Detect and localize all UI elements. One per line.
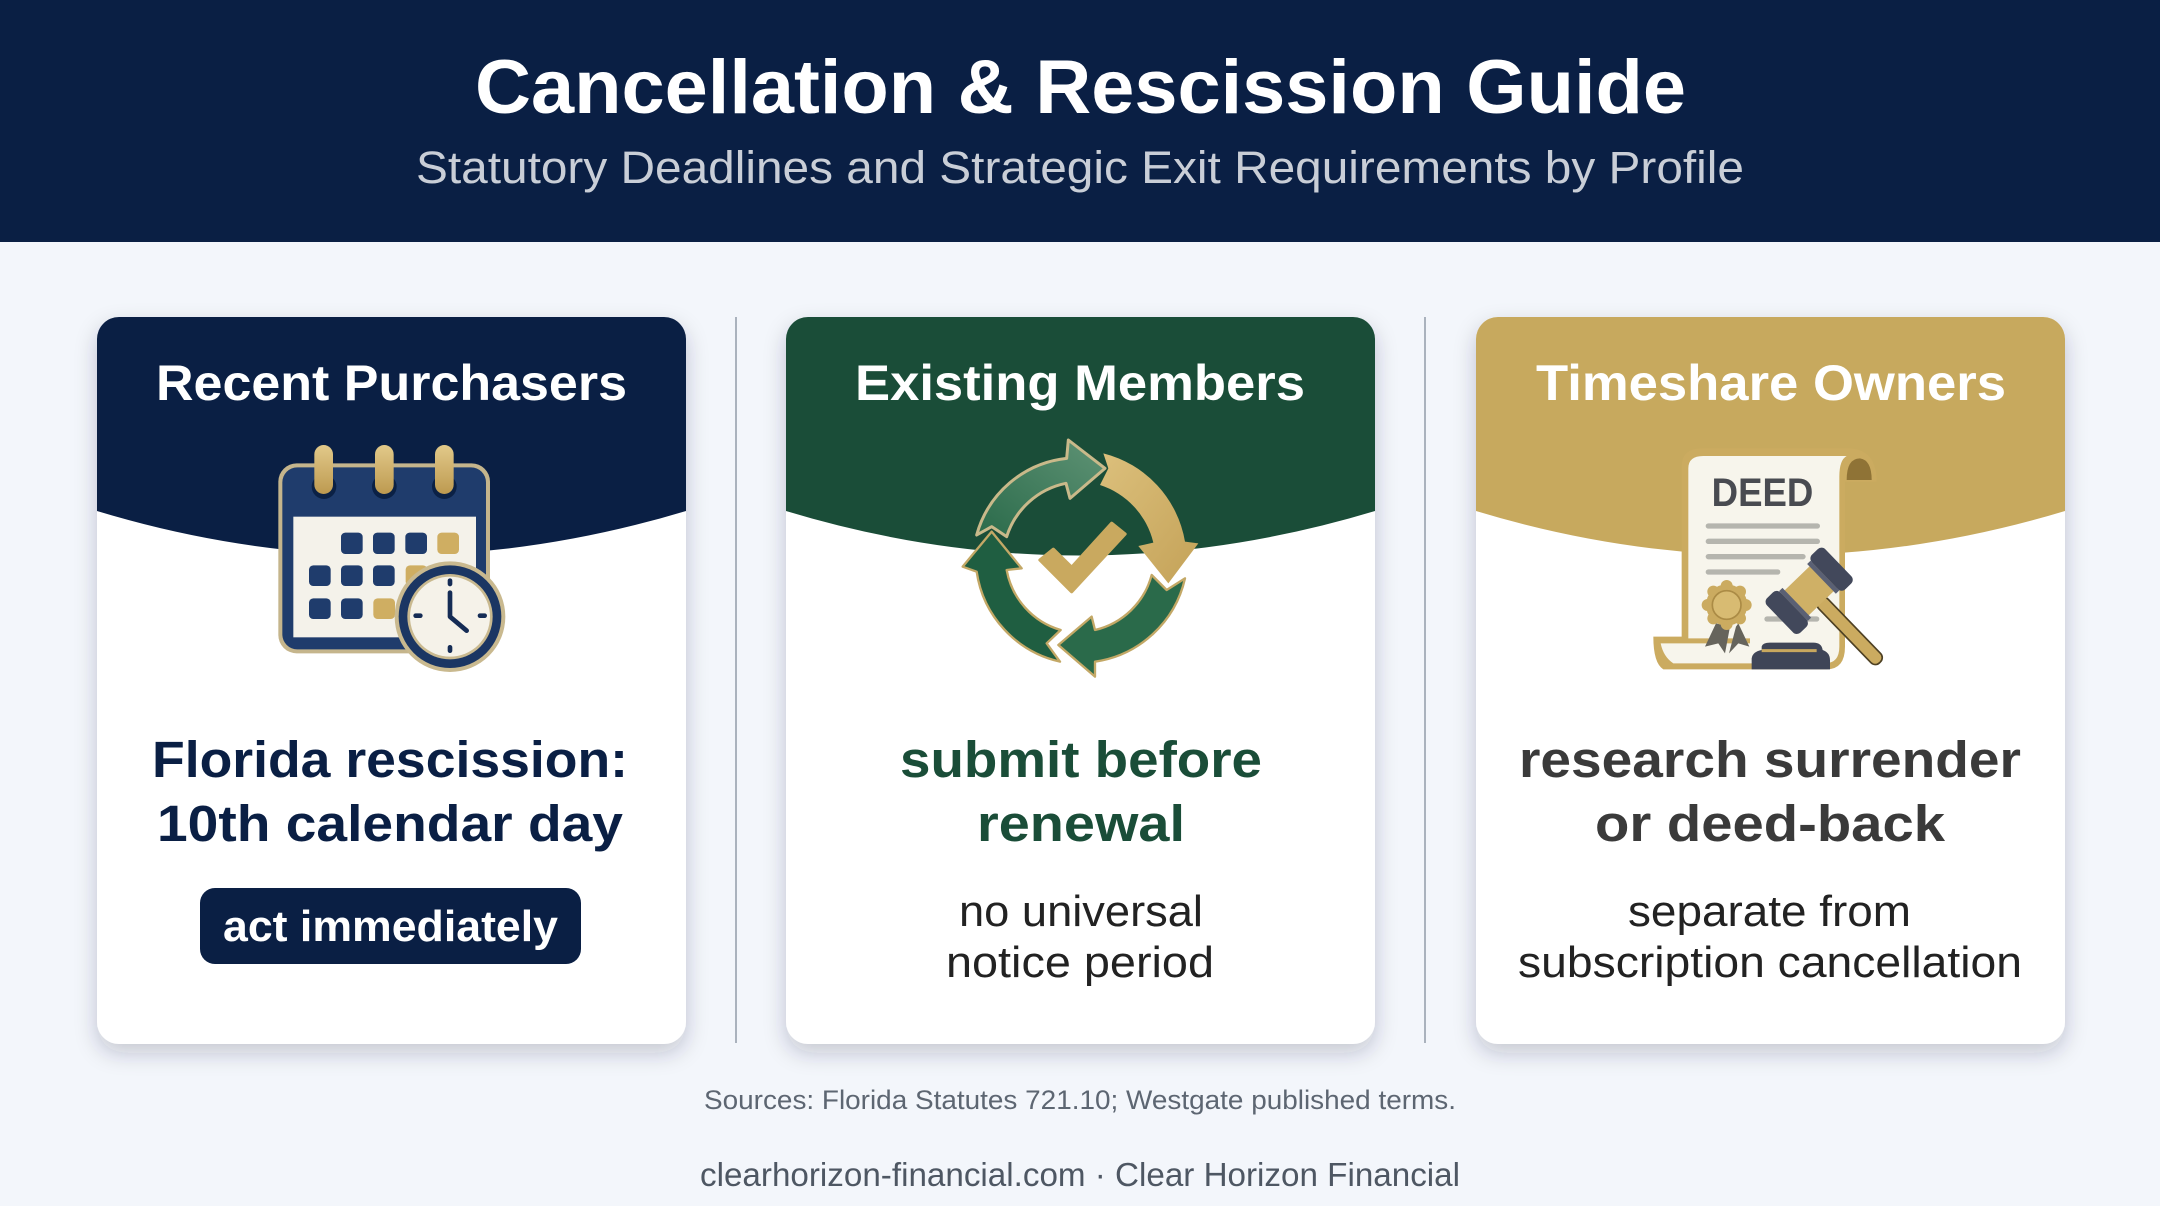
sources: Sources: Florida Statutes 721.10; Westgate published terms.: [704, 1085, 1456, 1115]
footer: clearhorizon-financial.com · Clear Horizon Financial: [700, 1156, 1460, 1193]
title: Cancellation & Rescission Guide: [475, 45, 1686, 130]
main text: research surrender or deed-back: research surrender: [1519, 731, 2021, 788]
pill: act immediately: act immediately: [223, 902, 559, 951]
panel: existing members: [786, 317, 1375, 1044]
panel: recent purchasers: [97, 317, 686, 1044]
main text: florida rescission: Florida rescission:: [152, 731, 628, 788]
main text: florida rescission: 10th calendar day: [157, 795, 624, 852]
main text: florida rescission: [152, 731, 628, 852]
main text: submit before renewal: renewal: [977, 795, 1185, 852]
main text: research surrender or deed-back: or deed-back: [1595, 795, 1946, 852]
panel: timeshare owners: [1476, 317, 2065, 1044]
main text: submit before renewal: [900, 731, 1262, 852]
heading: timeshare owners: Timeshare Owners: [1536, 355, 2006, 411]
pill: act immediately: [200, 888, 581, 964]
note: no universal notice period: notice period: [946, 938, 1214, 987]
main text: submit before renewal: submit before: [900, 731, 1262, 788]
icon: deed and gavel: [1653, 448, 1908, 691]
heading: recent purchasers: Recent Purchasers: [156, 355, 627, 411]
heading: existing members: Existing Members: [855, 355, 1305, 411]
icon: renewal arrows with check: [963, 440, 1198, 677]
note: separate from subscription cancellation: [1518, 887, 2022, 987]
note: no universal notice period: no universal: [959, 887, 1203, 936]
main text: research surrender or deed-back: [1519, 731, 2021, 852]
icon: calendar with clock: [278, 445, 505, 672]
note: separate from subscription cancellation: subscription cancellation: [1518, 938, 2022, 987]
subtitle: Statutory Deadlines and Strategic Exit Requirements by Profile: [416, 142, 1744, 193]
icon: deed and gavel: DEED: [1712, 471, 1813, 515]
header band: [0, 0, 2160, 242]
note: separate from subscription cancellation: separate from: [1628, 887, 1911, 936]
note: no universal notice period: [946, 887, 1214, 987]
